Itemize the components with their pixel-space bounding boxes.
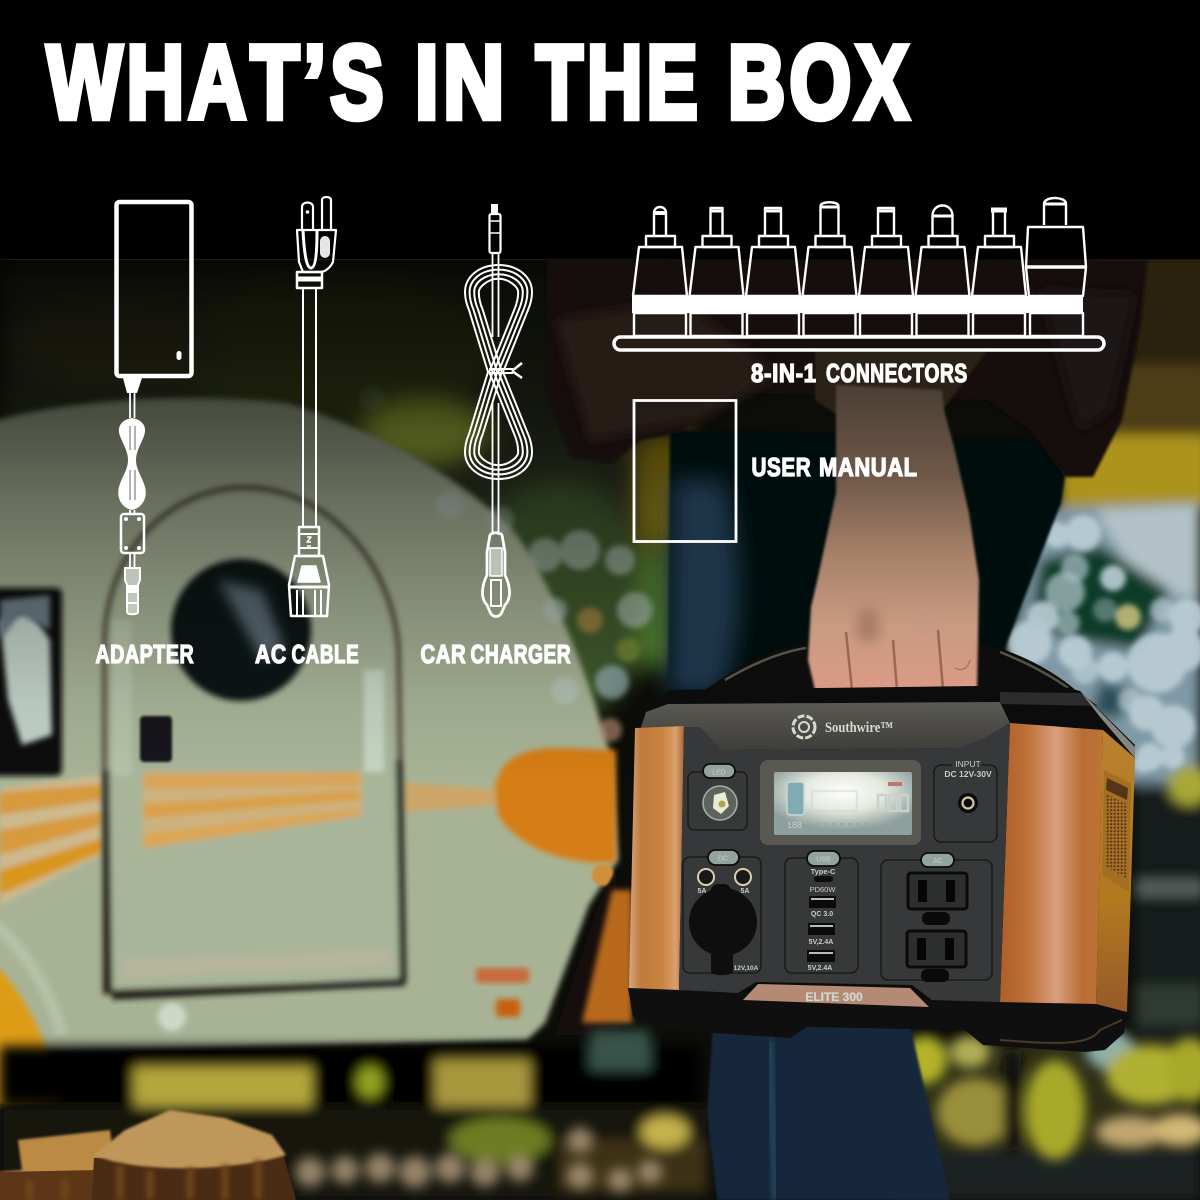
title: THE [536, 25, 702, 141]
title: BOX [728, 25, 913, 141]
orange stripes [0, 748, 616, 905]
power station product [628, 685, 1135, 1052]
input panel: DC 12V-30V [944, 769, 992, 779]
connector 7 [972, 210, 1026, 336]
icon: adapter [116, 202, 192, 614]
connector 3 [746, 208, 800, 336]
DC panel: DC [718, 856, 728, 862]
label: car charger [420, 641, 571, 669]
trailer lights and reflector [476, 968, 529, 983]
LED panel: LED [712, 770, 726, 776]
label: AC cable: CABLE [292, 641, 359, 669]
person [547, 260, 1147, 1200]
USB panel: 5V,2.4A [808, 965, 832, 972]
connector 5 [859, 208, 913, 336]
black wheel-well edge and orange post [555, 870, 620, 1035]
label: user manual: MANUAL [819, 454, 918, 482]
USB panel: Type-C [811, 867, 836, 876]
icon: 8-in-1 connectors [614, 198, 1104, 350]
icon: user manual [634, 400, 736, 542]
white strap [632, 296, 1083, 313]
grey front panel [679, 723, 1010, 1002]
bottom black base [628, 988, 1127, 1052]
label: 8-in-1 connectors: CONNECTORS [826, 360, 968, 388]
dark overlay fading down [0, 260, 672, 780]
connector 6 [916, 206, 970, 336]
icon: car charger [465, 204, 532, 616]
icon: AC cable [289, 197, 336, 616]
foliage [0, 260, 690, 720]
Southwire logo [793, 716, 893, 738]
input panel: INPUT [955, 759, 981, 769]
label: car charger: CAR [420, 641, 466, 669]
connector 1 [633, 207, 687, 336]
USB panel: PD60W [810, 885, 836, 894]
trailer body [0, 398, 618, 1052]
DC panel: 12V,10A [734, 965, 759, 972]
right-hand background [900, 255, 1200, 1200]
connector 4 [802, 202, 856, 336]
label: 8-in-1 connectors: 8-IN-1 [751, 360, 817, 388]
label: user manual: USER [752, 454, 811, 482]
right copper side [1096, 730, 1135, 1012]
LCD display [760, 760, 921, 845]
black header band [0, 0, 1200, 259]
connector 8 [1026, 198, 1086, 336]
trailer door [105, 488, 405, 996]
label: adapter: ADAPTER [96, 641, 194, 669]
side vent [1102, 770, 1131, 892]
label: AC cable: AC [255, 641, 287, 669]
plaid shirt [547, 260, 1147, 477]
label: user manual [752, 454, 918, 482]
label: 8-in-1 connectors [751, 360, 968, 388]
jeans lower [707, 1025, 950, 1200]
bokeh highlights [359, 385, 653, 742]
label: AC cable [255, 641, 359, 669]
right copper front [1000, 723, 1103, 1004]
DC panel [683, 850, 761, 975]
tree stump [0, 1110, 296, 1200]
AC panel [881, 853, 992, 982]
title [47, 25, 913, 141]
black top lid [636, 685, 1135, 760]
DC panel: 5A [698, 888, 706, 895]
LED panel [688, 764, 747, 830]
grey lid band [640, 702, 1010, 750]
USB panel [785, 851, 858, 973]
left copper panel [629, 726, 684, 990]
ELITE 300 plate: ELITE 300 [805, 990, 863, 1004]
ELITE 300 plate [743, 984, 929, 1007]
Southwire logo: Southwire™ [825, 720, 893, 736]
LCD display: 188 [787, 820, 802, 830]
connector 2 [690, 208, 744, 336]
USB panel: QC 3.0 [811, 911, 833, 918]
base bar [614, 337, 1104, 350]
sleeve cuff [815, 350, 988, 414]
label: car charger: CHARGER [470, 641, 571, 669]
USB panel: 5V,2.4A [809, 939, 833, 946]
title: IN [415, 25, 509, 141]
ground patches [0, 1030, 710, 1200]
input panel [934, 759, 997, 842]
light arc above fender [0, 925, 62, 1035]
figure-eight lower lobe [465, 372, 532, 479]
jeans upper [668, 430, 1065, 700]
yellow lower-left fender [0, 960, 60, 1106]
title: WHAT’S [47, 25, 388, 141]
USB panel: USB [816, 856, 831, 864]
bokeh row on ground [295, 1127, 662, 1192]
figure-eight upper lobe [465, 265, 532, 372]
carry handle [702, 643, 1078, 692]
DC panel: 5A [741, 888, 749, 895]
AC panel: AC [933, 858, 943, 865]
hand gripping handle [808, 385, 979, 690]
trailer window [0, 588, 62, 776]
